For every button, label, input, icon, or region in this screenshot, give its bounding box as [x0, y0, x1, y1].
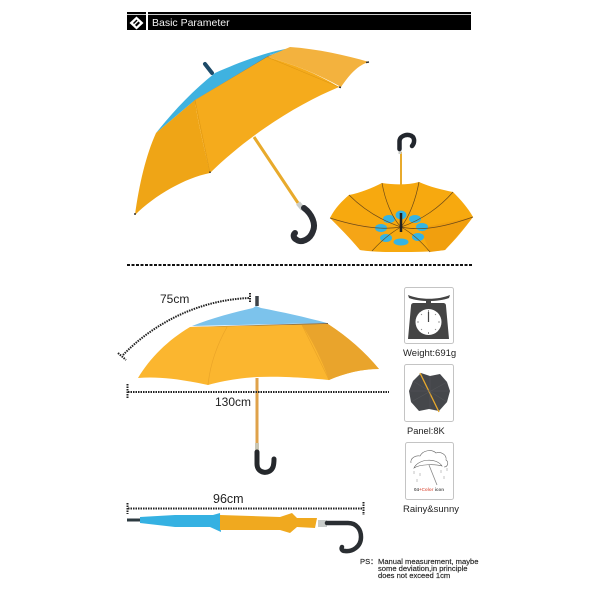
underside umbrella view: [330, 135, 473, 252]
dimension: 96cm: 96cm: [213, 492, 244, 506]
header bar: [148, 12, 471, 30]
measurement footnote: [360, 557, 478, 580]
measurement footnote: does not exceed 1cm: [378, 571, 450, 580]
measurement footnote: some deviation,in principle: [378, 564, 468, 573]
dimension: 75cm arc: [118, 292, 250, 360]
rainy and sunny label: Rainy&sunny: [403, 504, 459, 515]
rainy and sunny icon: [406, 442, 454, 500]
panel label: Panel:8K: [407, 426, 446, 436]
dimension: 75cm arc: 75cm: [160, 292, 189, 306]
closed umbrella: [127, 513, 361, 551]
measurement footnote: Manual measurement, maybe: [378, 557, 478, 566]
dashed divider: [127, 264, 472, 266]
main umbrella, side view: [135, 47, 369, 241]
dimension: 96cm: [128, 492, 364, 515]
rainy and sunny icon: 04+Color icon: [414, 487, 444, 492]
measurement footnote: PS：: [360, 557, 378, 566]
header bar: Basic Parameter: [152, 17, 230, 29]
dimension: 130cm: 130cm: [215, 395, 251, 409]
weight icon: [404, 288, 454, 344]
panel icon: [404, 364, 454, 422]
header logo: [127, 12, 146, 30]
front view umbrella: [138, 296, 379, 472]
weight label: Weight:691g: [403, 348, 456, 359]
